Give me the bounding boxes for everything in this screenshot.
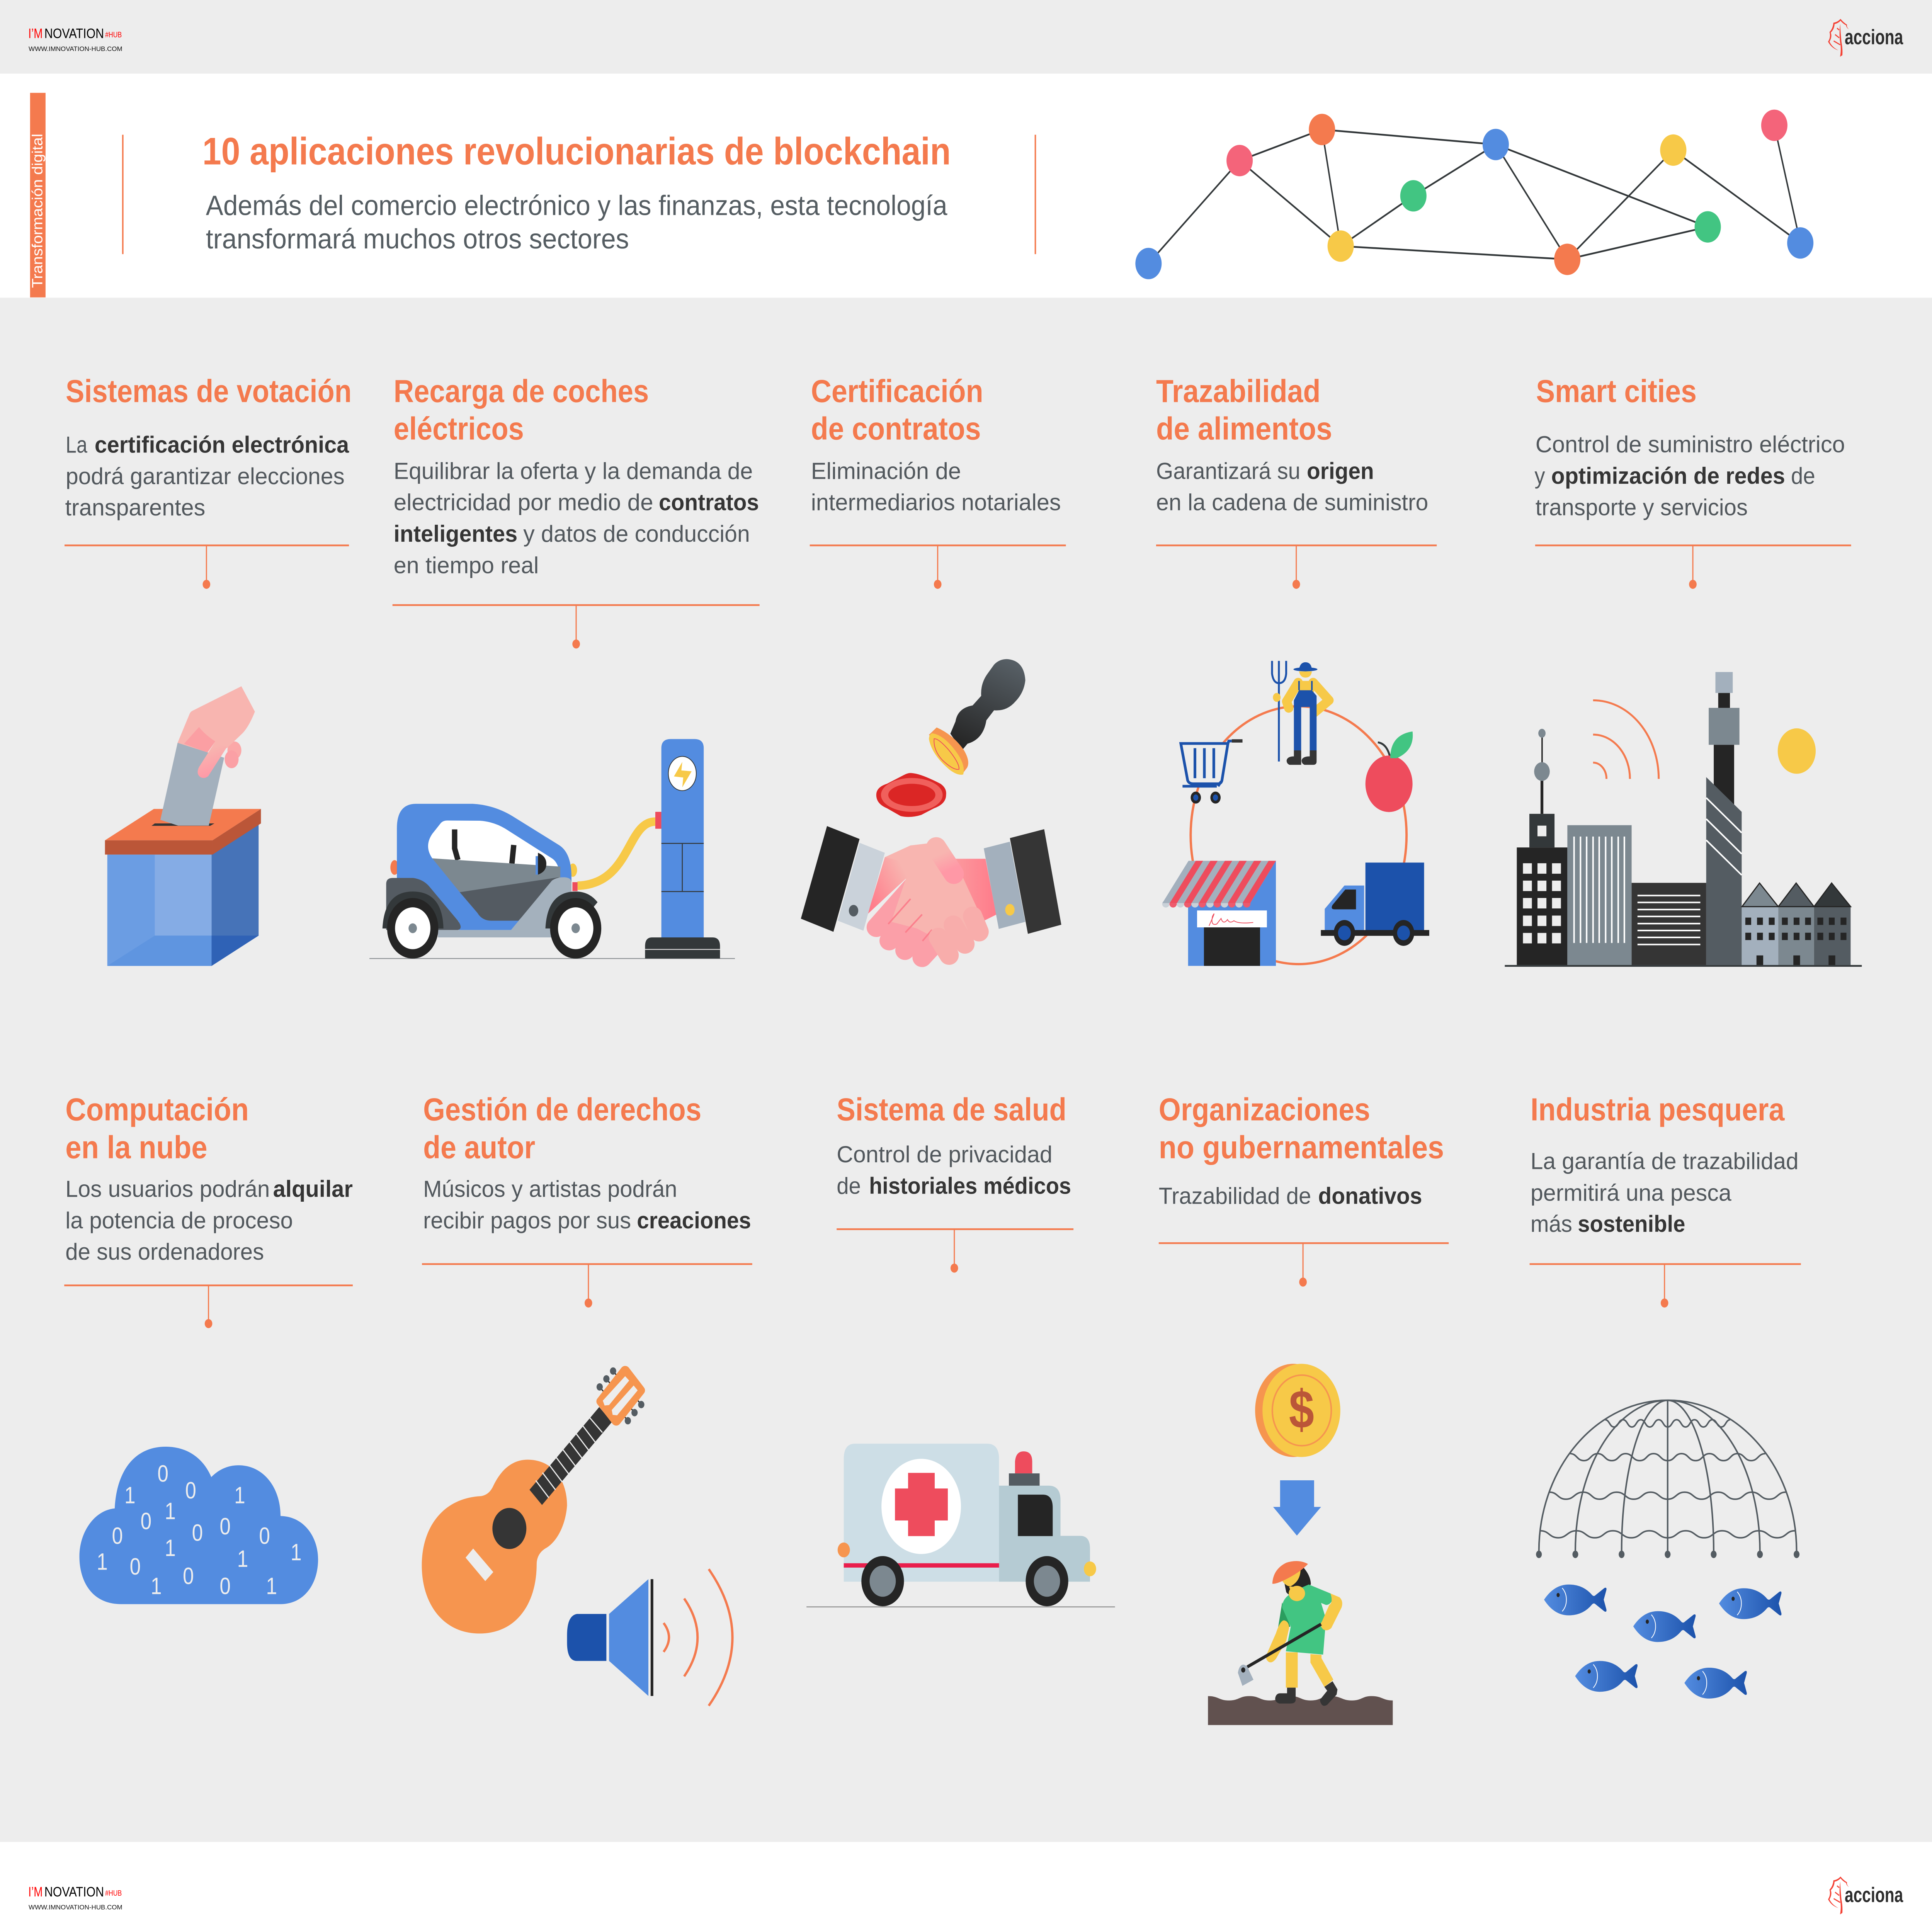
illustration: food supply cycle — [1162, 661, 1429, 966]
body text: transporte y servicios — [1536, 494, 1748, 520]
panel: Certificación de contratos — [801, 374, 1066, 957]
network graph — [1135, 110, 1813, 279]
icon: coin — [1255, 1364, 1340, 1457]
body text: transparentes — [65, 494, 205, 520]
illustration: ambulance — [806, 1444, 1115, 1607]
illustration: binary cloud: 1 — [234, 1482, 245, 1509]
connector — [64, 1284, 353, 1328]
body text — [394, 457, 759, 578]
fishing net — [1536, 1400, 1799, 1558]
heading: de alimentos — [1156, 411, 1332, 447]
body text: la potencia de proceso — [65, 1207, 293, 1233]
illustration: fishing net and fish — [1536, 1400, 1799, 1699]
connector — [837, 1228, 1073, 1273]
illustration: binary cloud: 1 — [237, 1546, 248, 1572]
body text: Control de privacidad — [837, 1141, 1053, 1167]
body text: electricidad por medio de — [394, 489, 653, 515]
logo: I'MNOVATION HUB: #HUB — [105, 1889, 122, 1898]
body text — [1531, 1148, 1799, 1237]
connector — [65, 544, 349, 589]
body text — [837, 1141, 1071, 1199]
logo: I'MNOVATION HUB: I’M — [28, 1884, 43, 1899]
logo: acciona: acciona — [1845, 1883, 1903, 1906]
logo: acciona — [1828, 19, 1903, 57]
illustration: binary cloud: 0 — [185, 1478, 196, 1504]
arrow — [1273, 1480, 1321, 1536]
connector — [1156, 544, 1437, 589]
body text: de — [1791, 463, 1815, 489]
logo: I'MNOVATION HUB: WWW.IMNOVATION-HUB.COM — [29, 1904, 122, 1911]
heading: Sistema de salud — [837, 1092, 1066, 1128]
body text — [65, 431, 349, 520]
logo: acciona: acciona — [1845, 25, 1903, 49]
body text: historiales médicos — [869, 1172, 1071, 1199]
illustration: binary cloud: 1 — [266, 1573, 277, 1600]
illustration: binary cloud: 0 — [130, 1554, 141, 1580]
panel: Trazabilidad de alimentos — [1156, 374, 1437, 966]
illustration: guitar and speaker — [422, 1367, 733, 1706]
worker with hoe — [1208, 1561, 1393, 1725]
connector — [1535, 544, 1851, 589]
panel: Industria pesquera — [1530, 1092, 1801, 1699]
illustration: stamp and handshake — [801, 659, 1061, 957]
illustration: binary cloud: 1 — [124, 1482, 136, 1509]
illustration: binary cloud: 0 — [259, 1523, 270, 1549]
illustration: binary cloud — [80, 1447, 318, 1604]
body text: sostenible — [1578, 1211, 1685, 1237]
illustration: binary cloud: 0 — [112, 1523, 123, 1549]
illustration: binary cloud: 1 — [165, 1535, 176, 1561]
body text: intermediarios notariales — [811, 489, 1061, 515]
heading: eléctricos — [394, 411, 524, 447]
header band — [0, 74, 1932, 298]
body text: alquilar — [273, 1175, 353, 1202]
heading: Recarga de coches — [394, 374, 649, 409]
heading: Trazabilidad — [1156, 374, 1320, 409]
top bar — [0, 0, 1932, 74]
body text: y — [1534, 463, 1545, 489]
body text — [423, 1175, 751, 1233]
connector — [422, 1263, 752, 1308]
heading: Gestión de derechos — [423, 1092, 701, 1128]
logo: acciona — [1828, 1876, 1903, 1915]
heading: de autor — [423, 1130, 535, 1165]
body text — [811, 457, 1061, 515]
body text: certificación electrónica — [95, 431, 349, 458]
body text: Eliminación de — [811, 457, 961, 484]
body text: La garantía de trazabilidad — [1531, 1148, 1799, 1174]
body text: recibir pagos por sus — [423, 1207, 631, 1233]
heading: Certificación — [811, 374, 983, 409]
logo: I'MNOVATION HUB: NOVATION — [44, 1884, 104, 1899]
heading: en la nube — [65, 1130, 207, 1165]
body text: origen — [1307, 457, 1374, 484]
body text: más — [1531, 1211, 1572, 1237]
connector — [1530, 1263, 1801, 1308]
body text: Los usuarios podrán — [65, 1175, 270, 1202]
heading — [394, 374, 649, 447]
illustration: binary cloud: 0 — [192, 1520, 203, 1546]
panel: Gestión de derechos de autor — [422, 1092, 752, 1706]
body text — [1534, 431, 1845, 520]
subtitle: Además del comercio electrónico y las finanzas, esta tecnología — [206, 190, 948, 221]
body text: de — [837, 1172, 861, 1199]
body text: creaciones — [637, 1207, 751, 1233]
heading — [1156, 374, 1332, 447]
panel: Smart cities — [1505, 374, 1862, 967]
illustration: binary cloud: 0 — [219, 1514, 231, 1540]
heading — [423, 1092, 701, 1165]
illustration: binary cloud: 0 — [219, 1573, 231, 1600]
logo: I'MNOVATION HUB: I’M — [28, 26, 43, 41]
heading: Industria pesquera — [1531, 1092, 1785, 1128]
connector — [1159, 1242, 1449, 1287]
body text: permitirá una pesca — [1531, 1179, 1732, 1206]
body text: optimización de redes — [1551, 463, 1785, 489]
heading: Organizaciones — [1159, 1092, 1370, 1128]
logo: I'MNOVATION HUB: WWW.IMNOVATION-HUB.COM — [29, 46, 122, 53]
illustration: binary cloud: 1 — [291, 1539, 302, 1566]
body text — [1159, 1182, 1422, 1209]
panel: Organizaciones no gubernamentales — [1159, 1092, 1449, 1725]
body text: Trazabilidad de — [1159, 1182, 1311, 1209]
illustration: binary cloud: 0 — [183, 1563, 194, 1589]
connector — [810, 544, 1066, 589]
connector — [393, 604, 760, 648]
heading — [1159, 1092, 1444, 1165]
body text: de sus ordenadores — [65, 1238, 264, 1265]
illustration: binary cloud: 1 — [151, 1573, 162, 1600]
logo: I'MNOVATION HUB — [28, 26, 122, 53]
illustration: binary cloud: 0 — [141, 1508, 151, 1535]
side tab: Transformación digital: Transformación digital — [29, 134, 46, 288]
heading — [811, 374, 983, 447]
body text: contratos — [659, 489, 759, 515]
heading: Smart cities — [1536, 374, 1697, 409]
heading: Sistemas de votación — [66, 374, 352, 409]
subtitle: transformará muchos otros sectores — [206, 224, 629, 255]
logo: I'MNOVATION HUB: #HUB — [105, 31, 122, 39]
fish school — [1544, 1585, 1781, 1699]
illustration: binary cloud: 1 — [165, 1498, 176, 1524]
body text: Músicos y artistas podrán — [423, 1175, 677, 1202]
panel: Recarga de coches eléctricos — [369, 374, 760, 959]
panel: Sistemas de votación — [65, 374, 352, 966]
illustration: city skyline — [1505, 672, 1862, 967]
body text: inteligentes — [394, 520, 517, 547]
body text: podrá garantizar elecciones — [66, 463, 345, 489]
footer bar — [0, 1842, 1932, 1932]
illustration: binary cloud: 0 — [157, 1461, 168, 1487]
body text — [1156, 457, 1428, 515]
body text — [65, 1175, 353, 1265]
illustration: electric car and charger — [369, 739, 735, 959]
heading — [65, 1092, 249, 1165]
body text: en la cadena de suministro — [1156, 489, 1428, 515]
body text: y datos de conducción — [523, 520, 750, 547]
body text: Control de suministro eléctrico — [1536, 431, 1845, 457]
title: 10 aplicaciones revolucionarias de blockchain — [202, 130, 951, 173]
logo: I'MNOVATION HUB: NOVATION — [44, 26, 104, 41]
logo: I'MNOVATION HUB — [28, 1884, 122, 1911]
icon: coin: $ — [1289, 1379, 1314, 1440]
heading: no gubernamentales — [1159, 1130, 1444, 1165]
subtitle — [206, 190, 948, 255]
body text: Equilibrar la oferta y la demanda de — [394, 457, 753, 484]
illustration: binary cloud: 1 — [97, 1549, 108, 1575]
body text: en tiempo real — [394, 552, 539, 578]
body text: Garantizará su — [1156, 457, 1300, 484]
panel: Computación en la nube — [64, 1092, 353, 1604]
heading: Computación — [65, 1092, 249, 1128]
illustration: ballot box — [105, 686, 261, 966]
body text: La — [66, 431, 88, 458]
illustration: coin, arrow and worker — [1208, 1364, 1393, 1725]
heading: de contratos — [811, 411, 981, 447]
panel: Sistema de salud — [806, 1092, 1115, 1607]
body text: donativos — [1318, 1182, 1422, 1209]
